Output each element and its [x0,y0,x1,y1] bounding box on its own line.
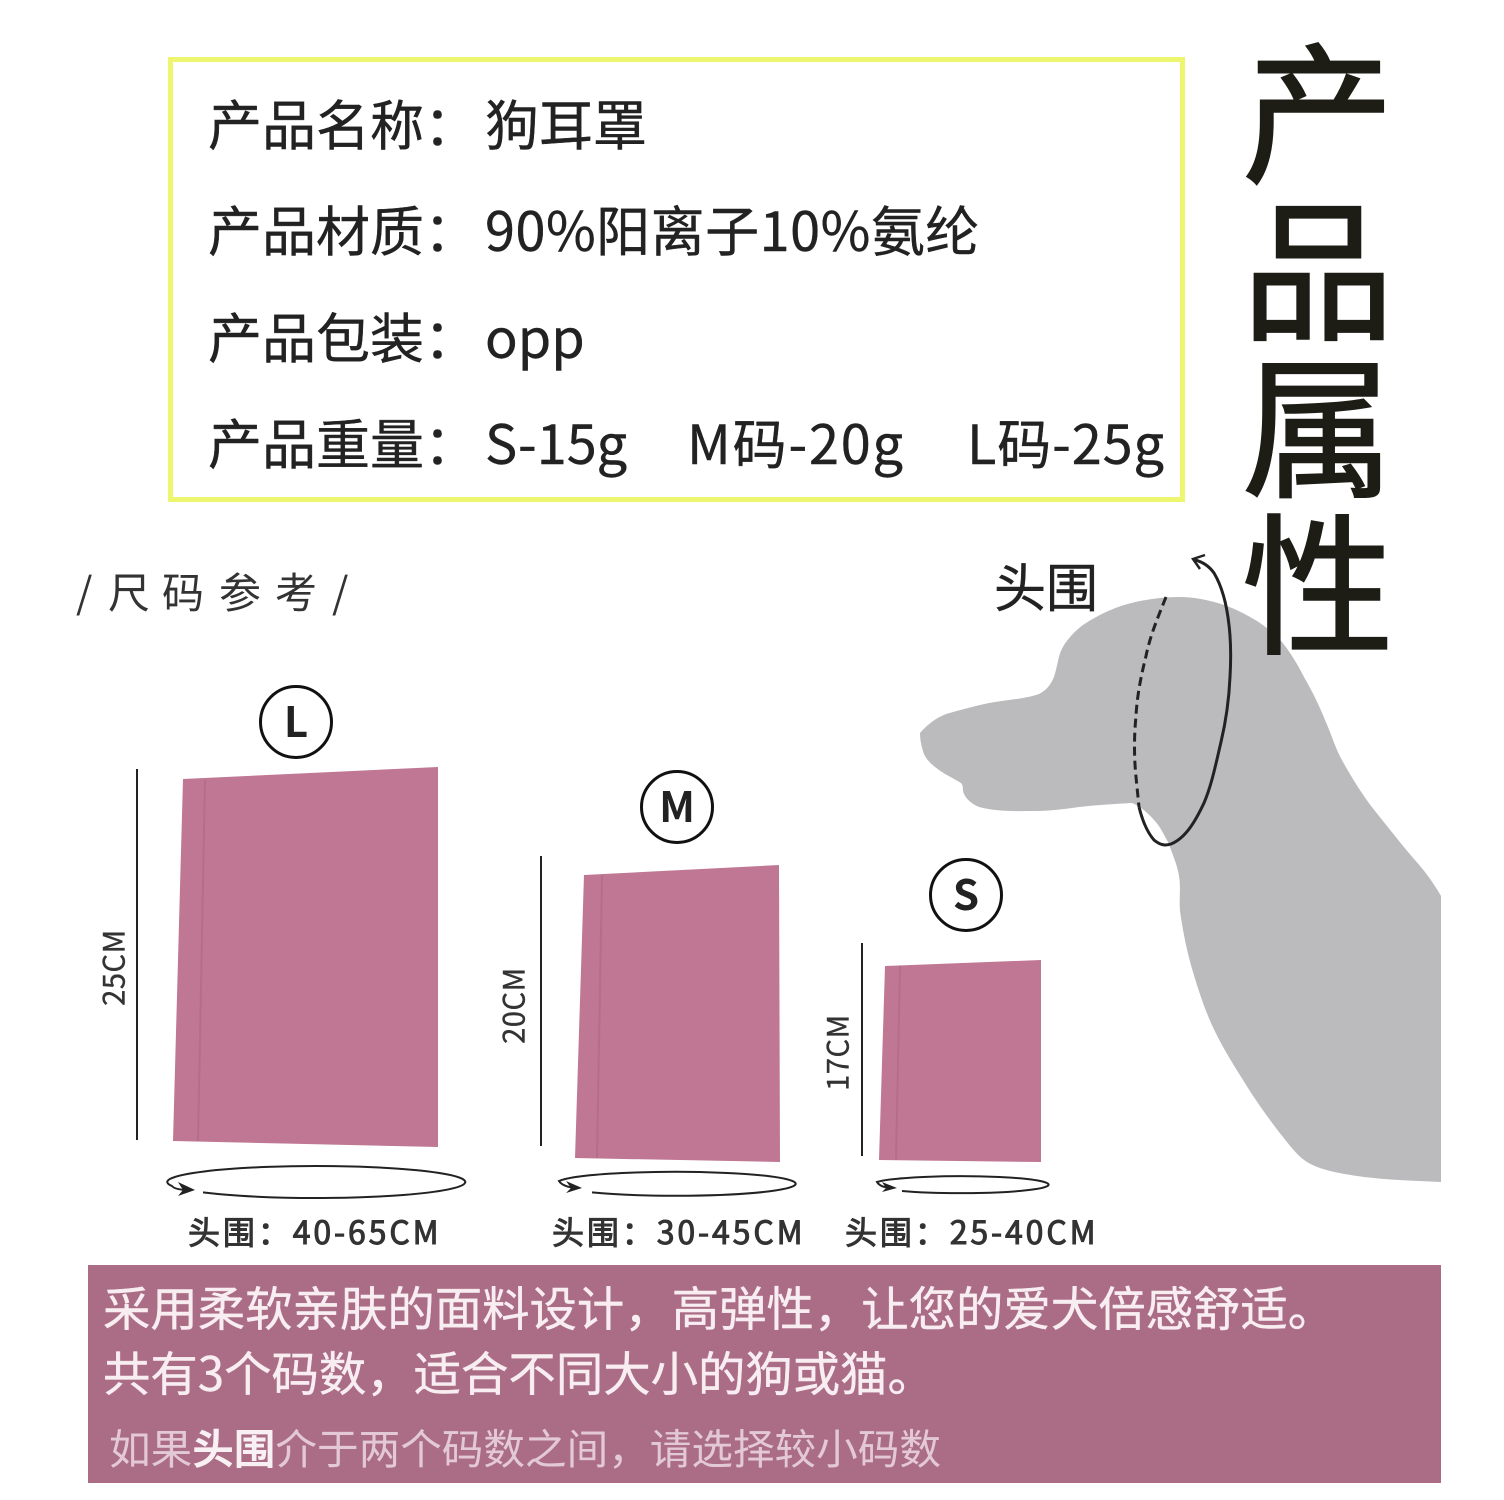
measuring ring [1139,560,1231,845]
text: product packaging: 产品包装： [208,295,478,374]
badge L: L [284,689,308,750]
dashed head line [1134,597,1166,807]
text: product name: 产品名称： [208,82,478,161]
badge M [640,770,714,844]
size L group [92,685,466,1254]
text: description line 2: 共有3个码数，适合不同大小的狗或猫。 [103,1336,935,1405]
circumference M: 头围：30-45CM [552,1208,806,1254]
badge S: S [953,862,979,923]
size reference heading: 码 [162,560,204,621]
panel: product info box: L码-25g [967,401,1165,480]
text: product weight [208,401,1165,480]
size reference heading: 参 [219,560,261,621]
size M group [492,770,806,1254]
size reference heading: 尺 [108,560,150,621]
height label L: 25CM [92,929,134,1006]
size reference heading: 考 [275,560,317,621]
panel: product info box [168,57,1185,502]
diagram: dog silhouette with head measurement [920,554,1441,1182]
title: product attributes vertical: 产 [1242,0,1394,215]
size S group [816,858,1099,1254]
panel: product info box: 90%阳离子10%氨纶 [485,188,980,267]
circumference L: 头围：40-65CM [188,1208,442,1254]
height label M: 20CM [492,967,534,1044]
panel: product info box: 狗耳罩 [485,82,647,161]
text: sizing note: 如果头围介于两个码数之间，请选择较小码数 [109,1416,941,1476]
text: product material: 产品材质： [208,188,478,267]
size reference heading: / [76,560,92,621]
title: product attributes vertical: 品 [1242,152,1394,372]
ear cover L [136,767,466,1199]
size reference heading: / [332,560,348,621]
height label S: 17CM [816,1014,858,1091]
ring arrow head [1193,555,1205,569]
badge L [259,685,333,759]
ear cover S [861,943,1050,1194]
text: product material [208,188,980,267]
label: head circumference: 头围 [994,547,1098,622]
panel: product info box: M码-20g [687,401,905,480]
text: description line 1: 采用柔软亲肤的面料设计，高弹性，让您的爱犬倍感舒适。 [103,1271,1335,1340]
title: product attributes vertical: 属 [1242,309,1394,529]
text: product weight: 产品重量： [208,401,478,480]
panel: product info box: S-15g [485,401,627,480]
size reference heading [76,560,348,621]
title: product attributes vertical [1242,0,1394,686]
text: product name [208,82,647,161]
badge S [929,858,1003,932]
ear cover M [540,856,797,1197]
circumference S: 头围：25-40CM [845,1208,1099,1254]
title: product attributes vertical: 性 [1242,466,1394,686]
panel: product info box: opp [485,295,585,374]
panel: description banner [88,1265,1441,1483]
badge M: M [659,774,695,835]
